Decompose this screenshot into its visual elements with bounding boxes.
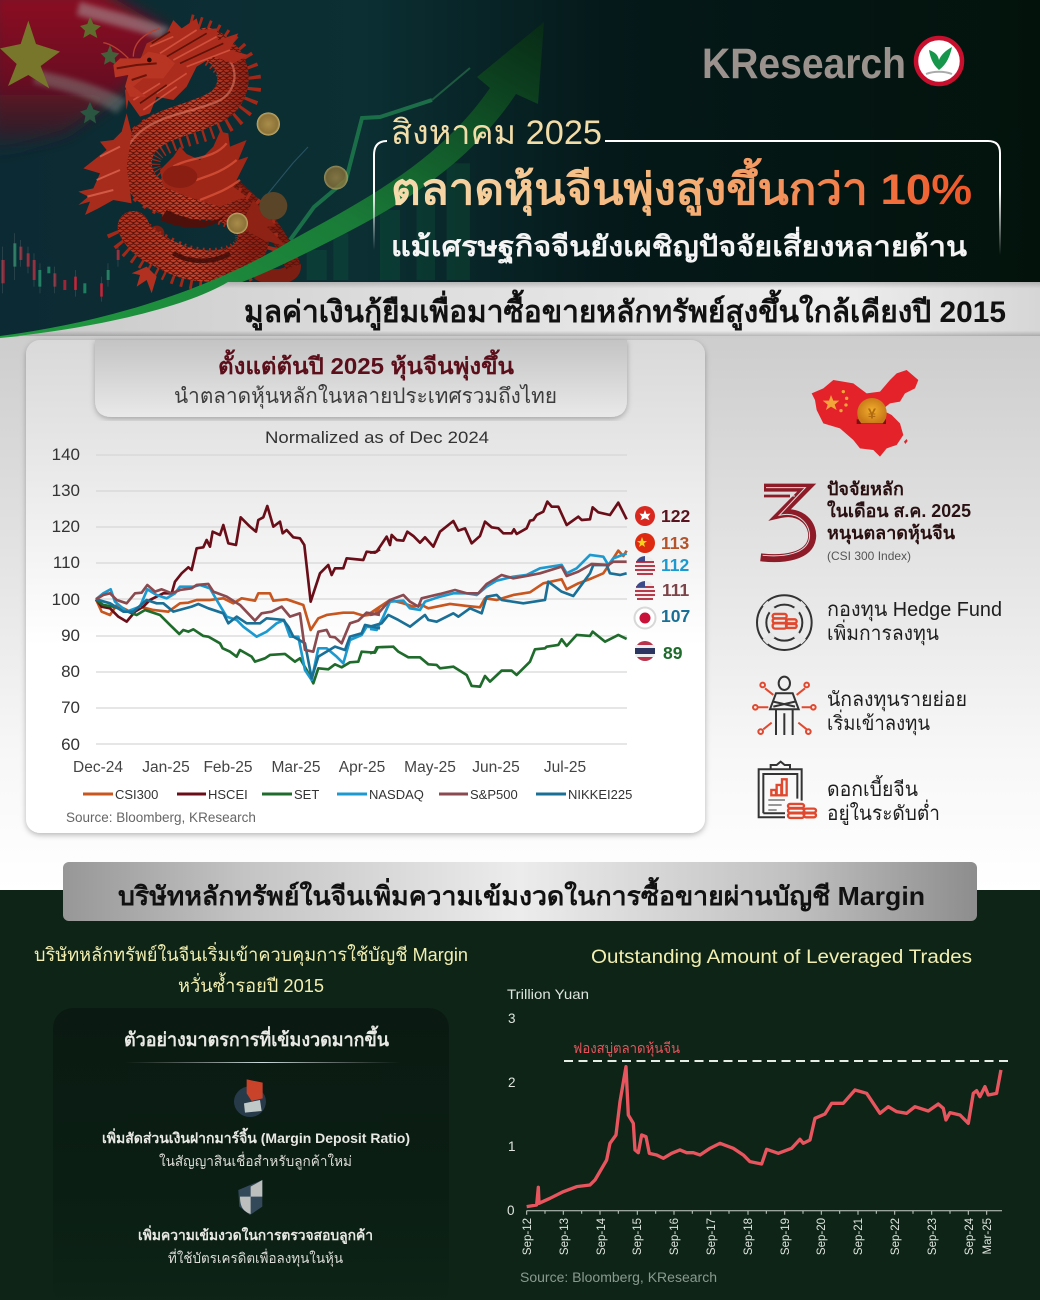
left column heading: หวั่นซ้ำรอยปี 2015: [178, 972, 324, 996]
icon: retail investor: [753, 677, 816, 735]
chart legend: NIKKEI225: [568, 787, 632, 802]
title frame: [605, 141, 1000, 190]
factor heading: ปัจจัยหลัก: [827, 479, 904, 499]
x axis labels: Feb-25: [203, 759, 253, 776]
factor: interest rate: [827, 775, 940, 826]
factor: retail: [827, 689, 967, 736]
x axis labels: Sep-12: [522, 1218, 534, 1255]
card heading box: [95, 340, 627, 417]
x axis labels: Sep-18: [743, 1218, 755, 1255]
flag: USA second: [635, 581, 655, 601]
coins: [227, 112, 348, 234]
y axis labels: 3: [508, 1011, 516, 1026]
headline: ตลาดหุ้นจีนพุ่งสูงขึ้นกว่า 10%: [391, 157, 972, 217]
panel heading: ตัวอย่างมาตรการที่เข้มงวดมากขึ้น: [124, 1025, 389, 1051]
logo: KResearch: KResearch: [702, 40, 906, 88]
measure one: เพิ่มสัดส่วนเงินฝากมาร์จิ้น (Margin Deposit Ratio): [102, 1127, 410, 1146]
banner: top silver: [18, 282, 1040, 336]
page background light section: [0, 335, 1040, 891]
x axis labels: May-25: [404, 759, 456, 776]
dragon body: [126, 43, 253, 266]
x axis labels: Dec-24: [73, 759, 123, 776]
background chart bars: [307, 163, 470, 280]
y axis labels: 2: [508, 1075, 516, 1090]
x axis labels: Sep-20: [816, 1218, 828, 1255]
x axis labels: Jul-25: [544, 759, 586, 776]
date: สิงหาคม 2025: [391, 114, 602, 152]
banner text: มูลค่าเงินกู้ยืมเพื่อมาซื้อขายหลักทรัพย์สูงขึ้นใกล้เคียงปี 2015: [244, 289, 1006, 331]
series: Nikkei225: [96, 565, 627, 678]
banner: margin heading: [63, 862, 977, 921]
y axis labels: 120: [52, 517, 80, 536]
measure two: เพิ่มความเข้มงวดในการตรวจสอบลูกค้า: [138, 1225, 373, 1244]
y axis labels: 1: [508, 1139, 516, 1154]
unit label: Trillion Yuan: [507, 986, 589, 1002]
banner text: บริษัทหลักทรัพย์ในจีนเพิ่มความเข้มงวดในการซื้อขายผ่านบัญชี Margin: [118, 876, 925, 912]
measure one: [102, 1127, 410, 1170]
x axis labels: Sep-22: [890, 1218, 902, 1255]
y axis labels: [507, 1011, 516, 1218]
y axis labels: 80: [61, 662, 80, 681]
factor heading: ในเดือน ส.ค. 2025: [827, 500, 971, 521]
flag: USA: [635, 556, 655, 576]
factor: hedge fund: [827, 599, 1002, 646]
factor heading: หนุนตลาดหุ้นจีน: [827, 523, 956, 545]
icon: clipboard and coins: [759, 762, 816, 818]
series: NASDAQ: [96, 553, 627, 680]
frame fading sides: [999, 190, 1001, 255]
line chart: leveraged trades: [507, 986, 1011, 1285]
dragon: [78, 18, 293, 293]
chart legend: [83, 787, 632, 802]
factor: interest rate: ดอกเบี้ยจีน: [827, 775, 918, 801]
factor: retail: เริ่มเข้าลงทุน: [827, 709, 930, 736]
measure one: ในสัญญาสินเชื่อสำหรับลูกค้าใหม่: [159, 1152, 352, 1170]
label 113: 113: [661, 533, 689, 553]
x axis labels: Jun-25: [472, 759, 520, 776]
dragon head: [113, 52, 175, 97]
dragon spine spikes: [127, 35, 257, 269]
line chart: normalized indices: [52, 445, 627, 776]
label 112: 112: [661, 555, 689, 575]
y axis labels: 140: [52, 445, 80, 464]
title block: [373, 114, 1001, 265]
thin green trend line: [290, 100, 432, 240]
chart legend: SET: [294, 787, 319, 802]
chart legend: NASDAQ: [369, 787, 424, 802]
dragon mane and spikes: [125, 18, 248, 117]
subheading: นำตลาดหุ้นหลักในหลายประเทศรวมถึงไทย: [174, 384, 557, 409]
y axis labels: 90: [61, 626, 80, 645]
y axis labels: 0: [507, 1203, 515, 1218]
y axis labels: 110: [53, 553, 80, 572]
factor: hedge fund: กองทุน Hedge Fund: [827, 599, 1002, 622]
dashed reference line: [564, 1060, 1011, 1062]
heading: ตั้งแต่ต้นปี 2025 หุ้นจีนพุ่งขึ้น: [218, 349, 514, 381]
series: S&P500: [96, 562, 627, 652]
icon: China map with coin: [812, 370, 918, 457]
x axis labels: Sep-23: [927, 1218, 939, 1255]
dragon flames and claws: [160, 132, 248, 207]
chart heading: leveraged trades: Outstanding Amount of Leveraged Trades: [591, 947, 972, 968]
chart subtitle: Normalized as of Dec 2024: [265, 429, 489, 447]
icon: China map with coin: ¥: [868, 407, 877, 423]
end value labels with flags: [634, 506, 690, 663]
x axis labels: Sep-17: [706, 1218, 718, 1255]
x axis labels: Jan-25: [142, 759, 190, 776]
factor: interest rate: อยู่ในระดับต่ำ: [827, 799, 940, 826]
header panel: hero artwork: [0, 0, 1040, 338]
factors list: [753, 479, 1002, 826]
y axis labels: 130: [52, 481, 80, 500]
icon: shield: [238, 1180, 262, 1215]
x axis labels: Mar-25: [982, 1218, 994, 1254]
y axis labels: 60: [61, 735, 80, 754]
factor heading: (CSI 300 Index): [827, 549, 911, 563]
x axis labels: Sep-19: [780, 1218, 792, 1255]
x axis labels: [522, 1217, 994, 1255]
icon: number 3: [761, 488, 812, 558]
left column heading: บริษัทหลักทรัพย์ในจีนเริ่มเข้าควบคุมการใช้บัญชี Margin: [34, 942, 468, 967]
x axis labels: Sep-15: [632, 1218, 644, 1255]
measure two: [138, 1225, 373, 1267]
x axis labels: Sep-13: [559, 1218, 571, 1255]
x axis labels: [73, 759, 586, 776]
bubble annotation: ฟองสบู่ตลาดหุ้นจีน: [573, 1040, 680, 1057]
chart legend: S&P500: [470, 787, 518, 802]
factor heading: [827, 479, 971, 563]
label 89: 89: [663, 643, 683, 663]
panel: stricter measures: [53, 1008, 449, 1300]
chart legend: CSI300: [115, 787, 158, 802]
x axis labels: Sep-14: [596, 1217, 608, 1255]
flag: China: [635, 533, 655, 553]
icon: pie cylinder: [234, 1079, 266, 1117]
x axis labels: Mar-25: [271, 759, 321, 776]
left column heading: [34, 942, 468, 996]
y axis labels: 100: [52, 590, 80, 609]
y axis labels: [52, 445, 80, 754]
measure two: ที่ใช้บัตรเครดิตเพื่อลงทุนในหุ้น: [168, 1249, 343, 1267]
candlesticks lower left: [1, 233, 120, 302]
axis: [526, 1211, 1002, 1215]
icon: KBank leaf: [916, 38, 962, 84]
factor: retail: นักลงทุนรายย่อย: [827, 689, 967, 712]
series: HSCEI: [96, 502, 627, 622]
flag: Hong Kong: [635, 506, 655, 526]
subhead: แม้เศรษฐกิจจีนยังเผชิญปัจจัยเสี่ยงหลายด้าน: [391, 226, 967, 265]
x axis labels: Sep-24: [964, 1217, 976, 1255]
label 122: 122: [661, 506, 690, 526]
label 111: 111: [662, 580, 690, 600]
y axis labels: 70: [61, 698, 80, 717]
flag: Thailand: [635, 641, 655, 661]
panel: equity chart card: [26, 340, 705, 833]
series: CSI300: [96, 551, 627, 630]
x axis labels: Sep-16: [669, 1218, 681, 1255]
source note: Source: Bloomberg, KResearch: [520, 1270, 717, 1285]
factor: hedge fund: เพิ่มการลงทุน: [827, 619, 939, 646]
series: SET: [96, 600, 627, 687]
frame fading left side: [373, 190, 375, 250]
flag of China: [0, 0, 170, 157]
small trend line: [268, 146, 308, 193]
rising green arrow: [0, 22, 544, 338]
x axis labels: Apr-25: [339, 759, 385, 776]
icon: hedge fund: [757, 595, 812, 650]
flag: Japan: [634, 608, 656, 628]
label 107: 107: [661, 606, 690, 626]
dragon back coil: [127, 187, 293, 277]
chart legend: HSCEI: [208, 787, 248, 802]
page background dark section: [0, 890, 1040, 1300]
series: outstanding leverage: [527, 1067, 1001, 1207]
source note: Source: Bloomberg, KResearch: [66, 810, 256, 825]
x axis labels: Sep-21: [853, 1218, 865, 1255]
